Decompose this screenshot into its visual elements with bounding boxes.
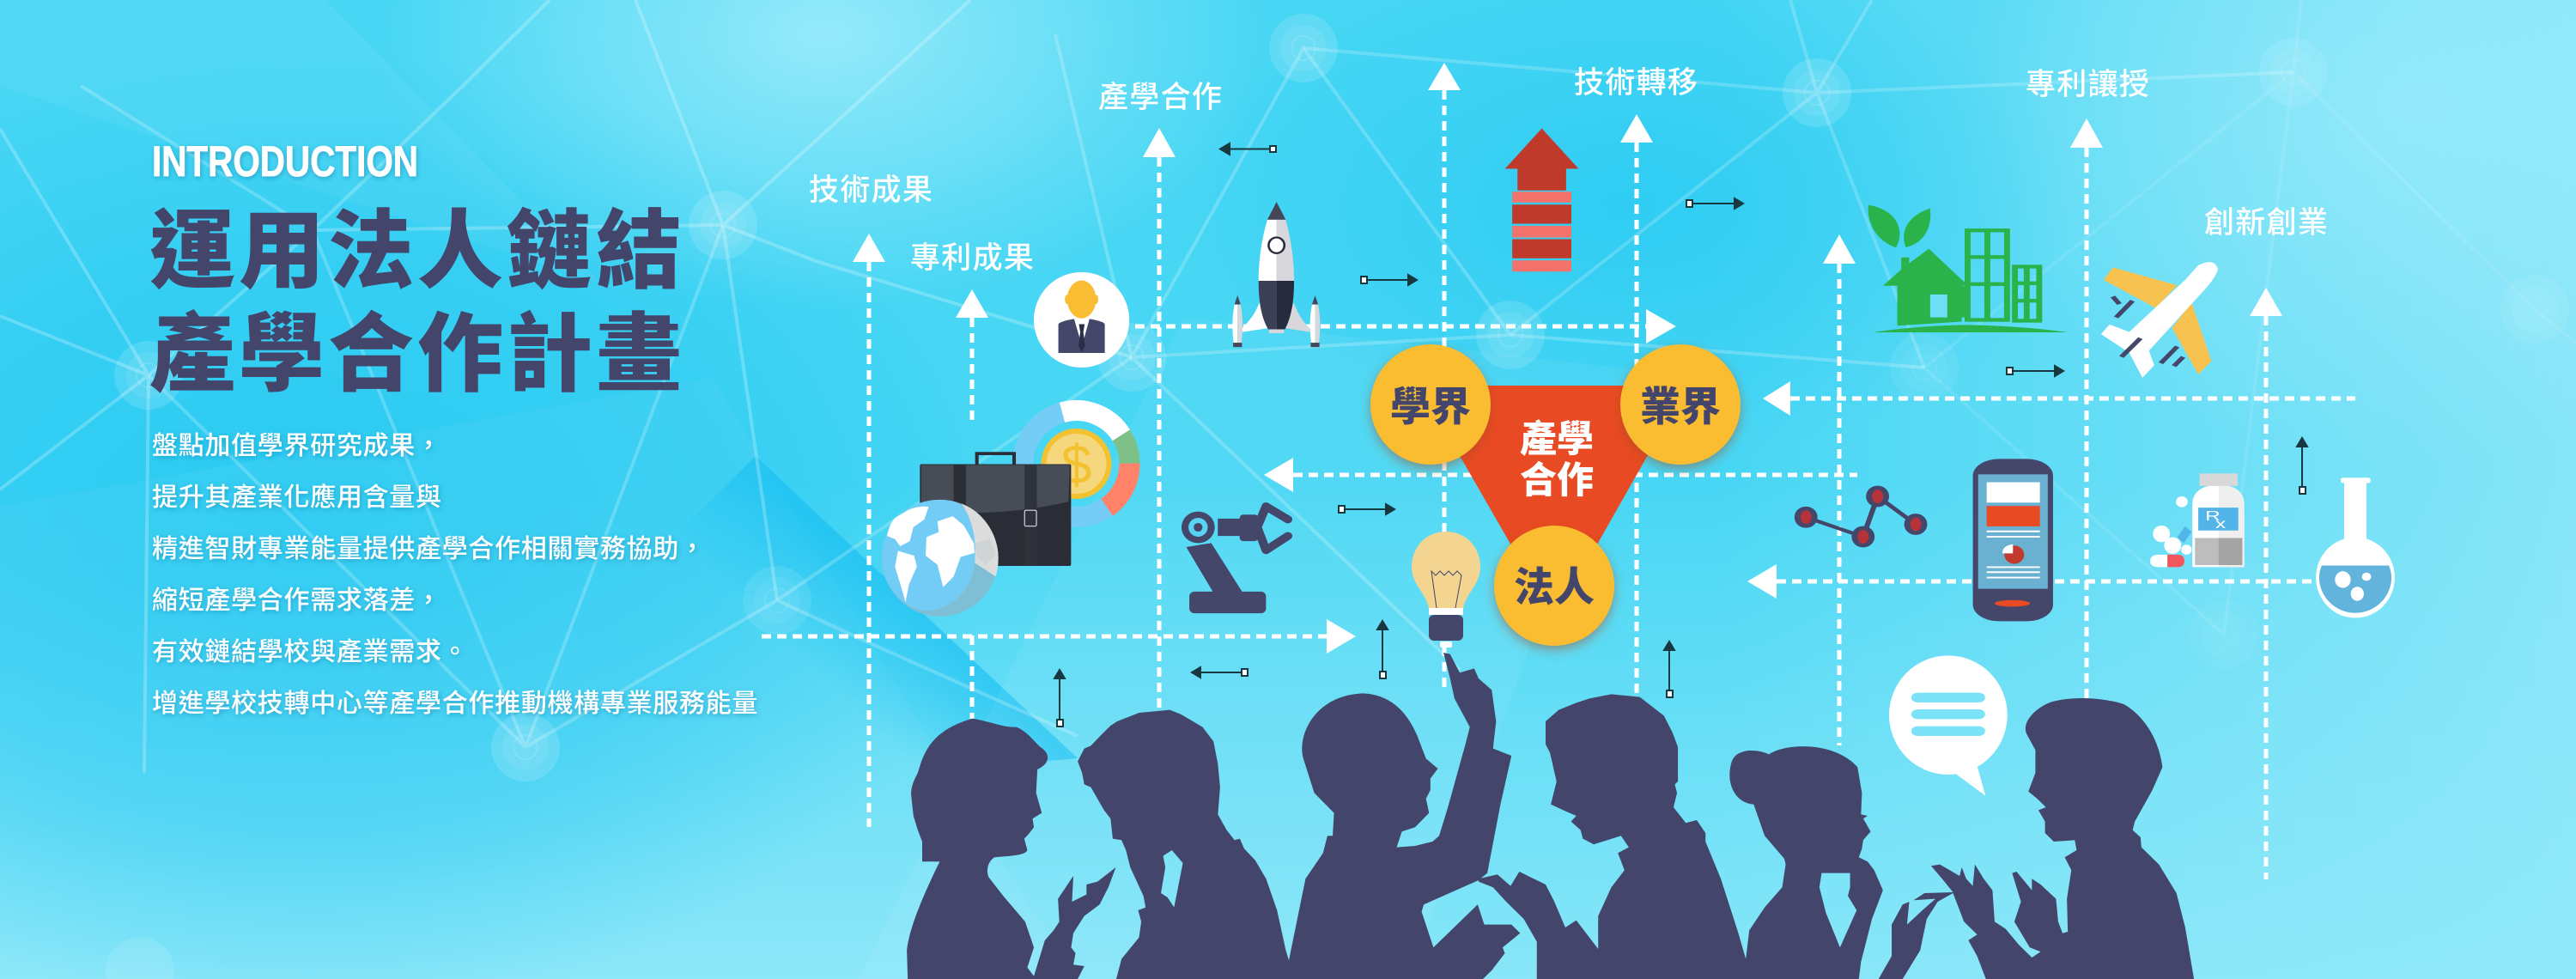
icon: finance donut with coin: [1003, 391, 1150, 537]
icon: medicine bottle and pills: R: [2205, 509, 2221, 524]
circle: juridical person: [1494, 526, 1614, 646]
intro text block: 縮短產學合作需求落差，: [152, 587, 442, 615]
silhouette: man resting chin and pointing man: [1078, 653, 1520, 979]
triangle caption: 合作: [1520, 460, 1594, 502]
outcome labels: [809, 66, 2329, 275]
icon: globe: [882, 500, 999, 617]
dashed arrows network: [762, 63, 2355, 879]
icon: green house and buildings: [1868, 205, 2069, 332]
icon: speech bubble: [1889, 655, 2008, 796]
icon: molecule network: [1797, 488, 1924, 545]
outcome labels: 創新創業: [2204, 206, 2329, 240]
intro text block: 提升其產業化應用含量與: [152, 483, 442, 512]
intro text block: 盤點加值學界研究成果，: [152, 432, 442, 460]
title: 產學合作計畫: [149, 307, 685, 403]
intro text block: [152, 432, 758, 718]
icon: lightbulb: [1412, 532, 1480, 648]
silhouette: man with curly hair gesturing: [1879, 698, 2194, 979]
outcome labels: 技術成果: [809, 173, 933, 207]
icon: red growth arrow: [1505, 129, 1578, 271]
triangle caption: [1520, 419, 1594, 502]
central triangle diagram: [1370, 344, 1741, 646]
silhouettes: group of people: [907, 653, 2194, 979]
circle: industry: [1620, 344, 1741, 465]
circle: academia: [1370, 344, 1491, 465]
icon: businessman: [1034, 272, 1129, 368]
outcome labels: 專利讓授: [2026, 68, 2150, 101]
title: 運用法人鏈結: [149, 204, 685, 300]
circle: academia: 學界: [1390, 384, 1471, 429]
icon: robot arm: [1182, 507, 1288, 613]
icon: briefcase: [920, 453, 1071, 566]
icon: medicine bottle and pills: [2150, 473, 2245, 567]
icon: medicine bottle and pills: x: [2215, 516, 2227, 532]
intro text block: 有效鏈結學校與產業需求。: [152, 638, 468, 666]
icon: rocket: [1232, 202, 1320, 347]
intro text block: 增進學校技轉中心等產學合作推動機構專業服務能量: [152, 690, 758, 718]
triangle: industry-academia cooperation: [1419, 386, 1687, 620]
intro text block: 精進智財專業能量提供產學合作相關實務協助，: [152, 535, 706, 563]
circle: juridical person: 法人: [1514, 564, 1595, 610]
small dark arrows: [1054, 143, 2307, 727]
icon: smartphone: [1973, 459, 2053, 621]
outcome labels: 產學合作: [1098, 81, 1223, 114]
icon: finance donut with coin: $: [1061, 434, 1091, 496]
heading label: INTRODUCTION: INTRODUCTION: [152, 137, 418, 185]
silhouette: man with glasses and woman with bun: [1479, 694, 1883, 979]
outcome labels: 專利成果: [910, 241, 1035, 275]
icon: airplane: [2101, 262, 2218, 378]
outcome labels: 技術轉移: [1574, 66, 1698, 100]
circle: industry: 業界: [1640, 384, 1721, 429]
triangle caption: 產學: [1520, 419, 1594, 460]
silhouette: woman with wavy hair: [907, 719, 1115, 979]
icon: lab flask: [2316, 477, 2395, 618]
title: [149, 204, 685, 403]
